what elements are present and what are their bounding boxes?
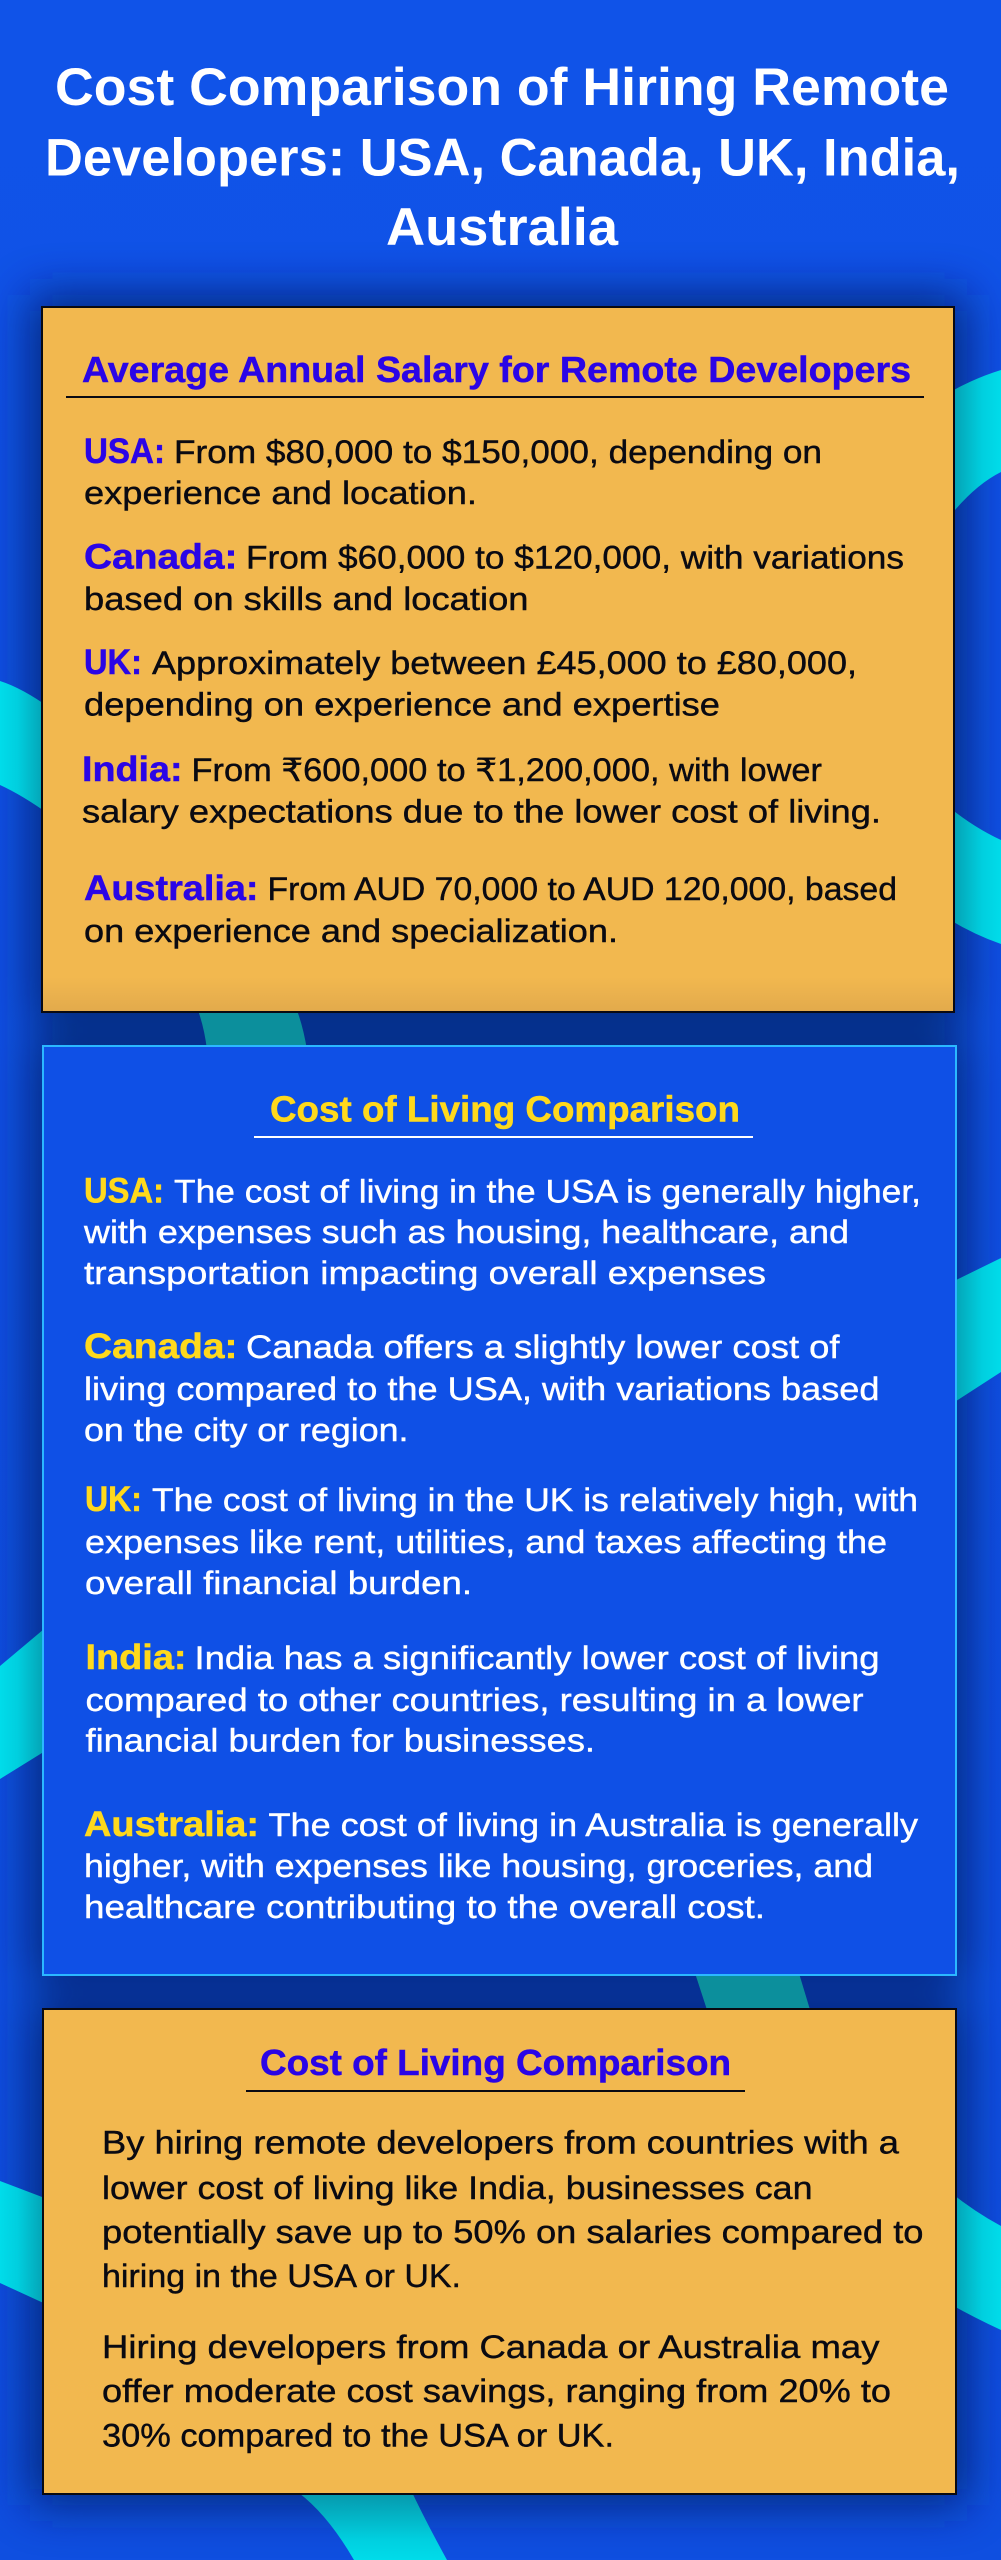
heading underline bbox=[254, 1136, 753, 1138]
paragraph: India savings: potentially save up to 50% on salaries compared to bbox=[102, 2214, 924, 2250]
salary: Australia bbox=[84, 869, 897, 949]
salary: UK: depending on experience and expertise bbox=[84, 686, 720, 722]
salary: Canada bbox=[84, 538, 904, 617]
living: Australia bbox=[84, 1805, 918, 1925]
title: Cost Comparison of Hiring Remote bbox=[55, 58, 949, 117]
living: India: compared to other countries, resulting in a lower bbox=[86, 1682, 864, 1718]
salary: Australia: on experience and specialization. bbox=[84, 913, 618, 949]
panel: savings bbox=[43, 2009, 956, 2494]
salary: Canada: From $60,000 to $120,000, with variations bbox=[246, 540, 904, 576]
salary: Australia: Australia: bbox=[84, 869, 258, 908]
paragraph: Canada and Australia savings: 30% compared to the USA or UK. bbox=[102, 2418, 614, 2454]
salary: UK bbox=[84, 643, 857, 722]
panel background bbox=[43, 1046, 956, 1975]
title bbox=[45, 58, 960, 257]
living: Canada bbox=[84, 1327, 879, 1448]
heading underline bbox=[66, 396, 924, 398]
living: USA: USA: bbox=[84, 1172, 164, 1210]
living: UK: overall financial burden. bbox=[85, 1565, 472, 1601]
salary: India: salary expectations due to the lower cost of living. bbox=[82, 794, 881, 830]
living: India: financial burden for businesses. bbox=[86, 1722, 595, 1758]
living: USA: The cost of living in the USA is generally higher, bbox=[174, 1174, 921, 1210]
living: Canada: on the city or region. bbox=[84, 1412, 408, 1448]
living: Canada: living compared to the USA, with variations based bbox=[84, 1371, 879, 1407]
paragraph: India savings: hiring in the USA or UK. bbox=[102, 2258, 461, 2294]
paragraph: Canada and Australia savings: offer moderate cost savings, ranging from 20% to bbox=[102, 2373, 891, 2409]
salary: UK: Approximately between £45,000 to £80,000, bbox=[152, 645, 857, 681]
panel: average annual salary bbox=[42, 307, 954, 1012]
living: USA: with expenses such as housing, healthcare, and bbox=[83, 1214, 849, 1250]
living: Australia: healthcare contributing to the overall cost. bbox=[84, 1889, 765, 1925]
living: UK: expenses like rent, utilities, and taxes affecting the bbox=[85, 1524, 887, 1560]
living: USA: transportation impacting overall expenses bbox=[84, 1255, 766, 1291]
paragraph: India savings bbox=[102, 2124, 924, 2294]
paragraph: India savings: lower cost of living like India, businesses can bbox=[102, 2170, 812, 2206]
panel background bbox=[43, 2009, 956, 2494]
salary: India: India: bbox=[82, 750, 182, 789]
salary: India: From ₹600,000 to ₹1,200,000, with lower bbox=[192, 752, 822, 788]
heading: cost of living savings: Cost of Living Comparison bbox=[260, 2042, 731, 2083]
living: Canada: Canada: bbox=[84, 1327, 238, 1366]
living: USA bbox=[83, 1172, 921, 1291]
heading: average annual salary: Average Annual Salary for Remote Developers bbox=[82, 349, 911, 390]
salary: USA: experience and location. bbox=[84, 475, 477, 511]
panel: cost of living comparison bbox=[43, 1046, 956, 1975]
living: Australia: The cost of living in Australia is generally bbox=[268, 1807, 918, 1843]
salary: UK: UK: bbox=[84, 643, 142, 682]
living: Canada: Canada offers a slightly lower cost of bbox=[246, 1329, 840, 1365]
title: Australia bbox=[386, 198, 619, 257]
paragraph: India savings: By hiring remote developers from countries with a bbox=[102, 2124, 899, 2160]
title: Developers: USA, Canada, UK, India, bbox=[45, 128, 960, 188]
salary: USA bbox=[84, 432, 822, 511]
living: India bbox=[86, 1638, 880, 1758]
living: India: India: bbox=[86, 1638, 186, 1677]
paragraph: Canada and Australia savings bbox=[102, 2329, 891, 2454]
paragraph: Canada and Australia savings: Hiring developers from Canada or Australia may bbox=[102, 2329, 880, 2365]
salary: Canada: based on skills and location bbox=[84, 581, 528, 617]
living: UK: UK: bbox=[85, 1480, 142, 1519]
living: Australia: higher, with expenses like housing, groceries, and bbox=[84, 1848, 873, 1884]
living: UK: The cost of living in the UK is relatively high, with bbox=[152, 1482, 918, 1518]
salary: USA: From $80,000 to $150,000, depending on bbox=[174, 434, 822, 470]
living: India: India has a significantly lower cost of living bbox=[194, 1640, 880, 1676]
living: UK bbox=[85, 1480, 918, 1601]
salary: Canada: Canada: bbox=[84, 538, 238, 576]
heading underline bbox=[246, 2090, 745, 2092]
heading: cost of living: Cost of Living Comparison bbox=[270, 1088, 740, 1130]
salary: Australia: From AUD 70,000 to AUD 120,000, based bbox=[268, 871, 897, 907]
salary: India bbox=[82, 750, 881, 830]
salary: USA: USA: bbox=[84, 432, 165, 471]
panel background bbox=[42, 307, 954, 1012]
living: Australia: Australia: bbox=[84, 1805, 259, 1844]
